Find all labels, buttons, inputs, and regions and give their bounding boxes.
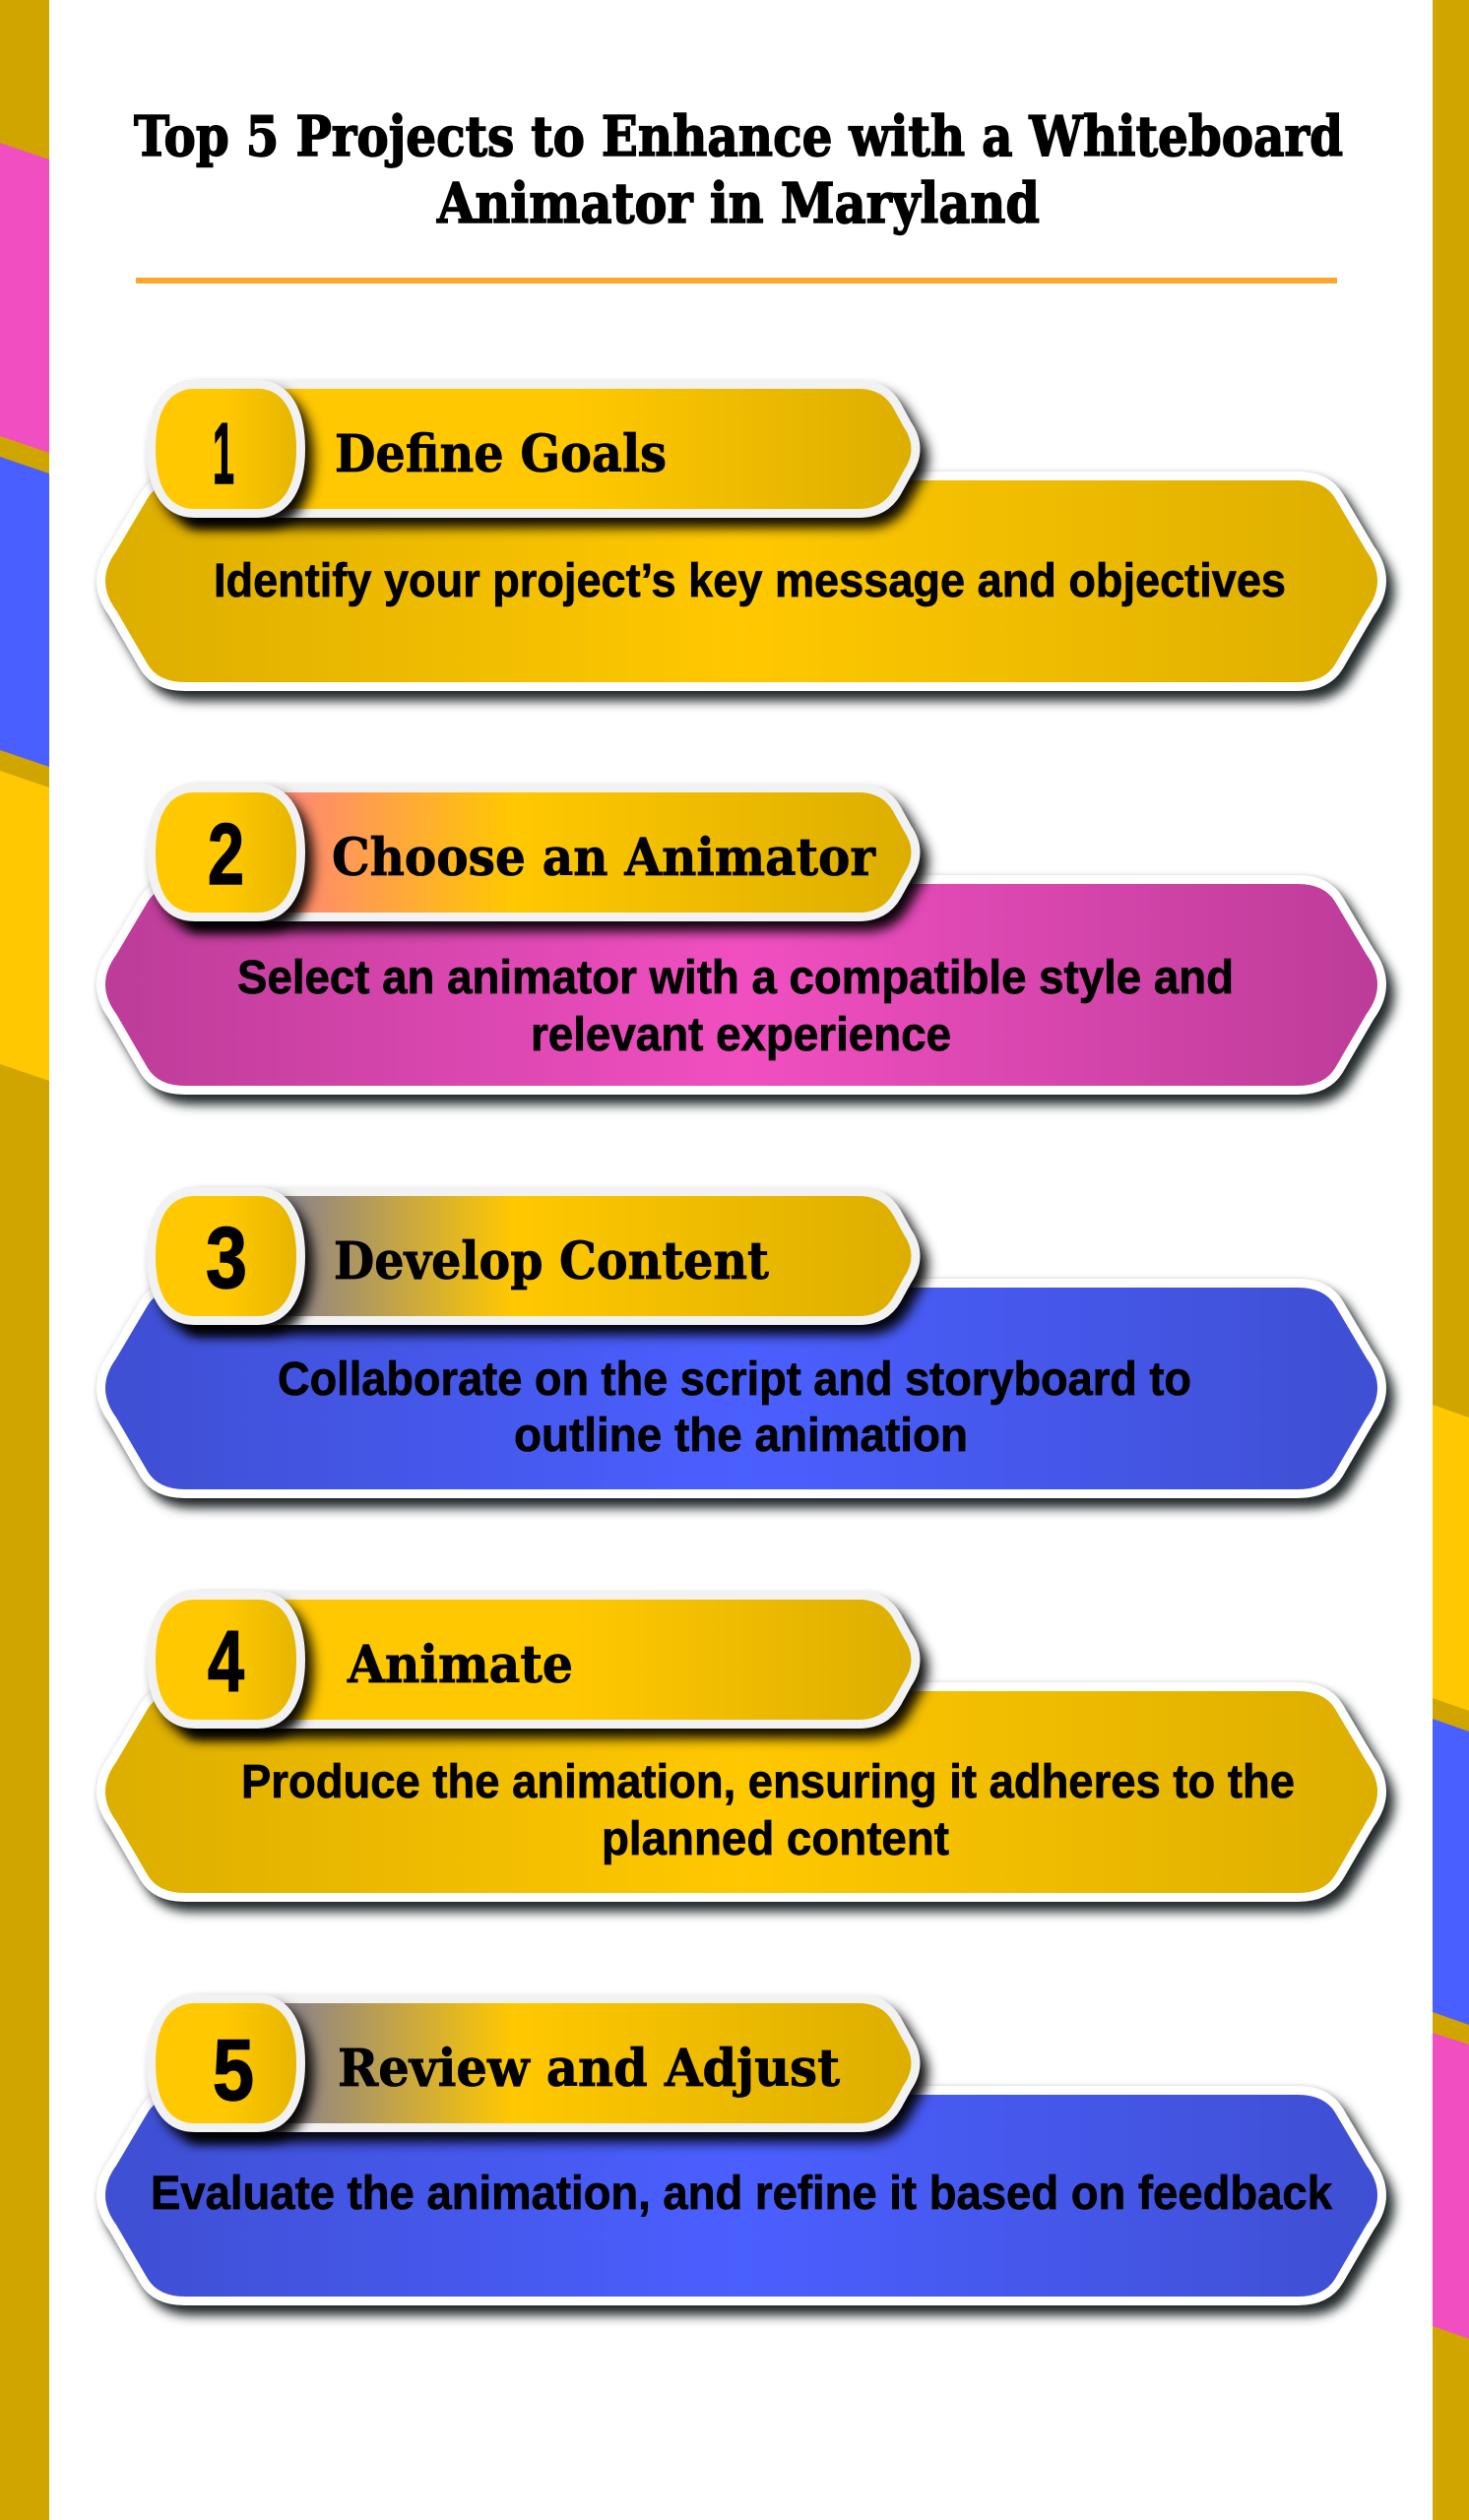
- step 2 description panel: [105, 884, 1377, 1086]
- step 4 description: [241, 1756, 1295, 1865]
- step 4 number: 4: [208, 1612, 244, 1710]
- title divider: [136, 278, 1337, 284]
- step 1 card: 1: [213, 405, 234, 502]
- step 5 card: [105, 2003, 1377, 2297]
- step 4 description: planned content: [602, 1813, 949, 1865]
- step 1 description panel: [105, 480, 1377, 682]
- step 3 description: Collaborate on the script and storyboard to: [278, 1354, 1191, 1406]
- step 4 card: [105, 1600, 1377, 1893]
- step 4 description: Produce the animation, ensuring it adheres to the: [241, 1756, 1295, 1808]
- step 3 heading: Develop Content: [334, 1231, 769, 1292]
- step 5 number: 5: [213, 2021, 254, 2118]
- right decorative band: [1433, 0, 1469, 2520]
- step 2 number: 2: [208, 805, 244, 903]
- step 2 description: relevant experience: [531, 1009, 951, 1061]
- title: [134, 104, 1343, 236]
- step 2 description: [237, 952, 1234, 1061]
- step 4 number badge: [156, 1600, 296, 1720]
- step 1 title ribbon: [187, 389, 912, 509]
- step 3 description panel: [105, 1288, 1377, 1489]
- step 3 card: [105, 1196, 1377, 1489]
- step 3 number: 3: [206, 1209, 247, 1306]
- step 4 description panel: [105, 1691, 1377, 1893]
- step 2 description: Select an animator with a compatible style and: [237, 952, 1234, 1004]
- step 4 title ribbon: [187, 1600, 912, 1720]
- step 2 title ribbon: [187, 792, 912, 913]
- step 4 heading: Animate: [347, 1635, 573, 1695]
- step 2 number badge: [156, 792, 296, 913]
- step 5 description: Evaluate the animation, and refine it based on feedback: [151, 2168, 1332, 2220]
- step 3 title ribbon: [187, 1196, 912, 1316]
- step 5 heading: Review and Adjust: [338, 2039, 840, 2099]
- step 5 number badge: [156, 2003, 296, 2123]
- step 1 heading: Define Goals: [335, 424, 667, 484]
- step 2 heading: Choose an Animator: [332, 828, 876, 888]
- step 2 card: [105, 792, 1377, 1086]
- step 1 number badge: [156, 389, 296, 509]
- left decorative band: [0, 0, 49, 2520]
- step 3 number badge: [156, 1196, 296, 1316]
- step 5 description panel: [105, 2095, 1377, 2297]
- step 3 description: [278, 1354, 1191, 1462]
- title: Animator in Maryland: [436, 171, 1040, 236]
- step 5 title ribbon: [187, 2003, 912, 2123]
- step 1 card: [105, 389, 1377, 682]
- step 1 description: Identify your project’s key message and objectives: [214, 555, 1286, 607]
- step 3 description: outline the animation: [514, 1410, 968, 1462]
